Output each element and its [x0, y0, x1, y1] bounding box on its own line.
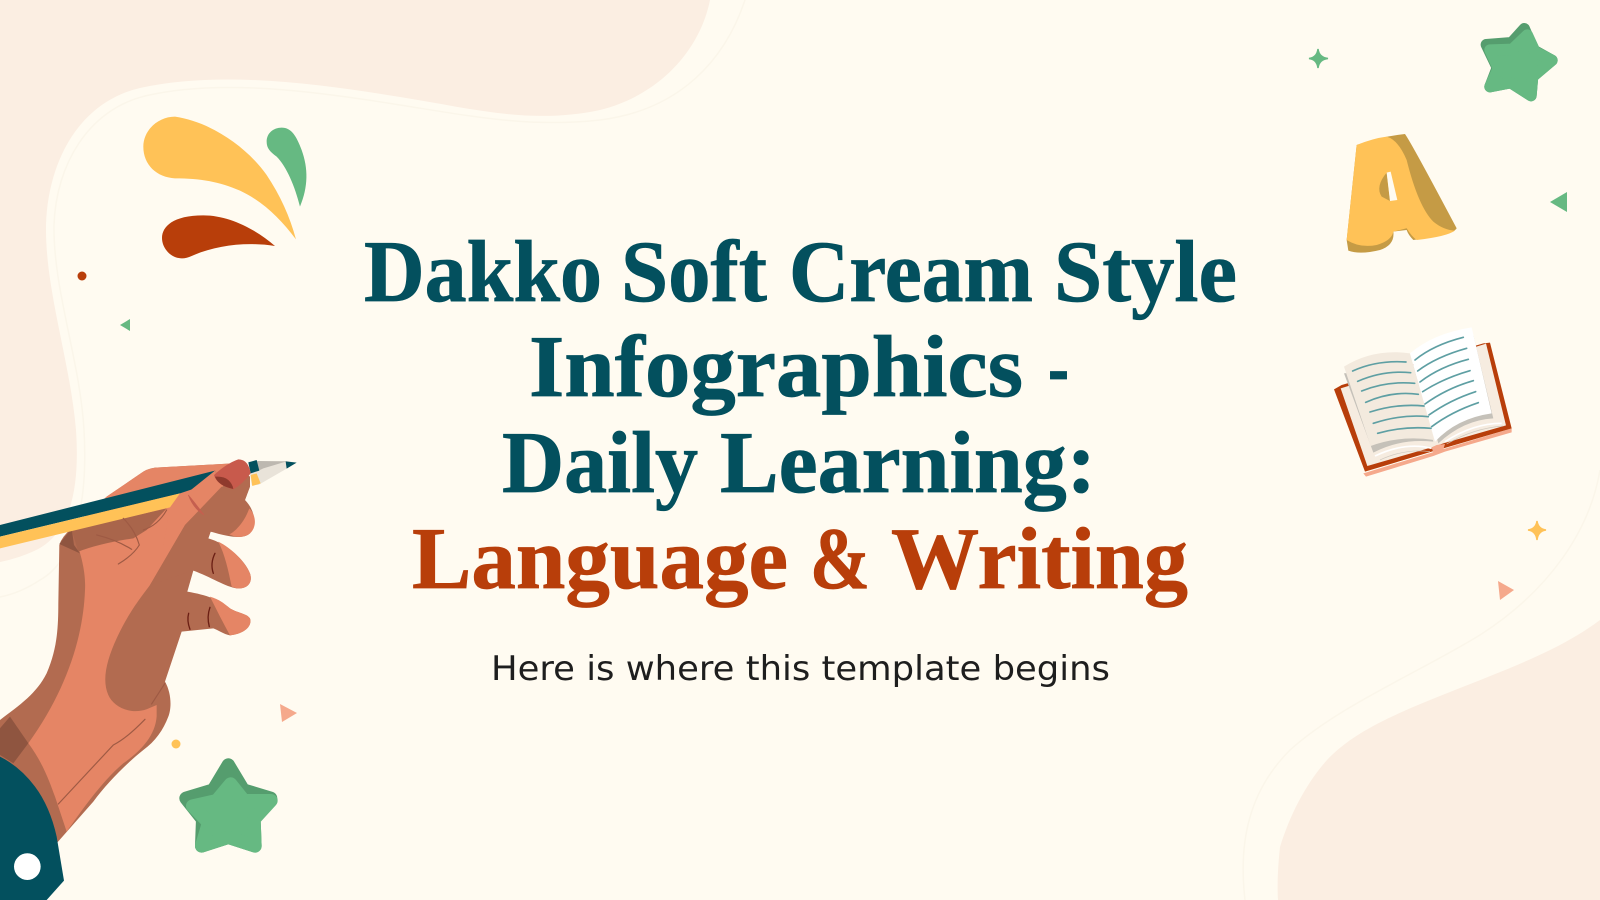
icon: open book: [1334, 327, 1512, 477]
title line 4: Writing: [891, 511, 1188, 608]
title line 3: Daily: [502, 415, 698, 512]
decoration: salmon triangle left: [280, 704, 297, 722]
title line 3: [502, 415, 1096, 512]
title line 1: [364, 224, 1237, 321]
title line 1: Soft: [621, 224, 767, 321]
creases: [58, 495, 215, 804]
title line 3: Learning:: [720, 415, 1096, 512]
pencil body: [0, 471, 220, 537]
decoration: colourful splash: [143, 117, 306, 258]
illustration: hand holding pencil: [0, 459, 297, 900]
decoration: green sparkle: [1309, 49, 1328, 68]
title line 4: Language: [412, 511, 788, 608]
background blob: top left: [0, 0, 710, 562]
decoration: green star bottom left: [186, 765, 271, 846]
icon: 3D letter A: [1347, 134, 1457, 253]
thumb over pencil: [150, 471, 223, 585]
title line 4: [412, 511, 1188, 608]
shadow under pencil: [72, 508, 167, 552]
finger tips: [218, 542, 251, 588]
decoration: yellow sparkle: [1528, 521, 1546, 540]
title line 1: Style: [1054, 224, 1237, 321]
pencil tip: [248, 461, 297, 485]
background blob: bottom right: [1278, 620, 1600, 900]
title line 1: Dakko: [364, 224, 602, 321]
fingernail: [214, 459, 251, 489]
title line 2: Infographics: [529, 319, 1023, 416]
decoration: green triangle left: [120, 319, 130, 331]
wrist band shadow: [0, 717, 28, 763]
title line 4: &: [810, 511, 870, 608]
hand silhouette: [0, 463, 254, 843]
title line 2: -: [1048, 319, 1069, 416]
subtitle: Here is where this template begins: [491, 649, 1110, 689]
decoration: yellow dot: [172, 740, 180, 748]
palm light area: [28, 463, 233, 832]
main title: [364, 224, 1237, 608]
decoration: salmon triangle right: [1498, 581, 1514, 600]
sleeve with button: [0, 757, 64, 900]
decoration: green star top right: [1486, 29, 1552, 96]
title line 1: Cream: [789, 224, 1033, 321]
decoration: red dot: [78, 272, 86, 280]
decoration: green triangle right: [1550, 192, 1567, 212]
